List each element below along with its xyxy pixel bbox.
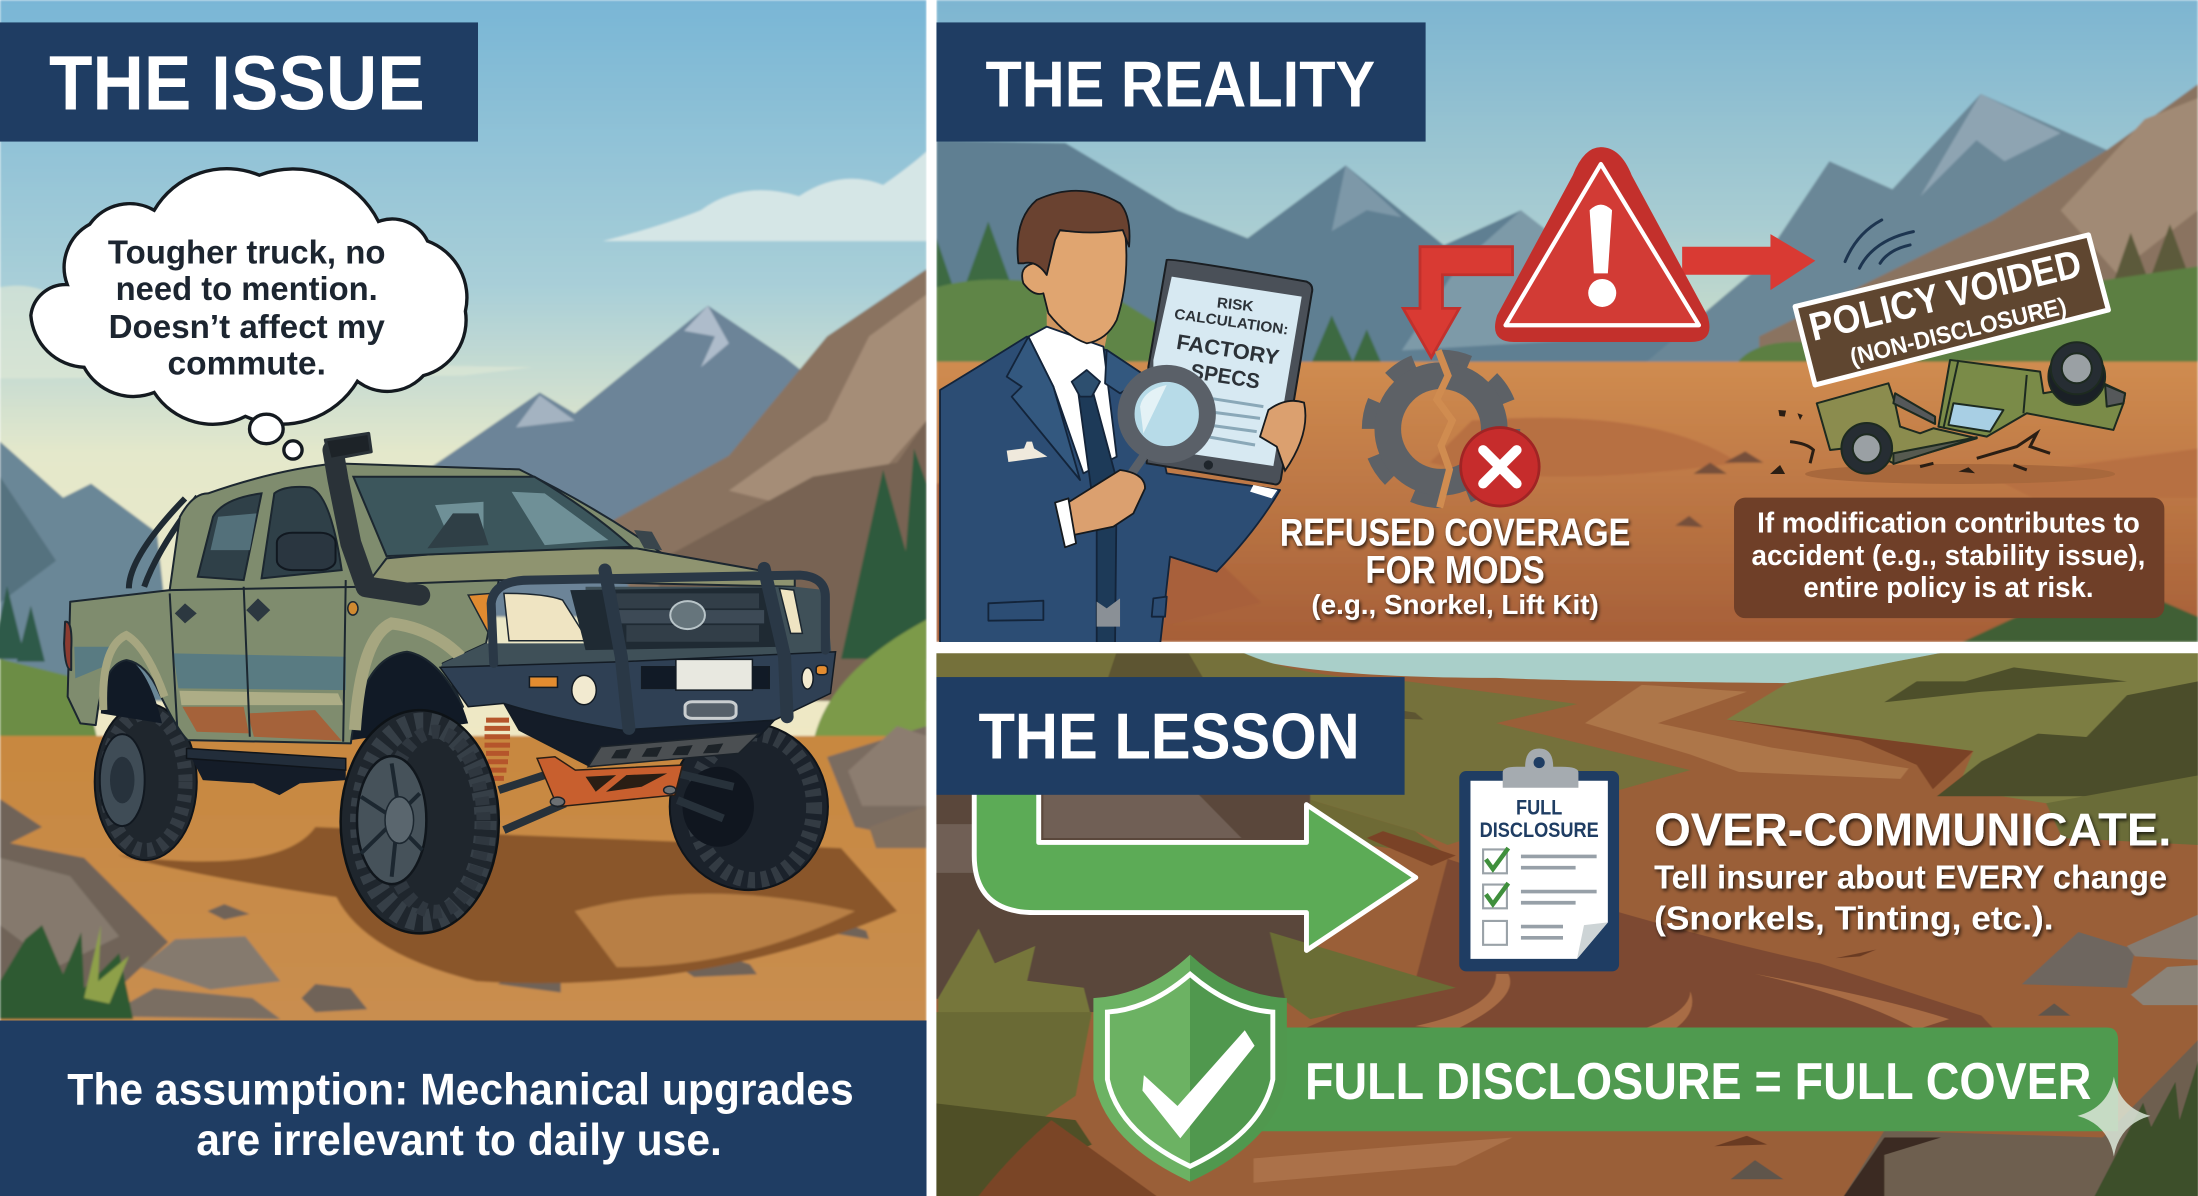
warning triangle with arrows: [1403, 147, 1815, 357]
arrow to policy voided: [1682, 234, 1815, 290]
sky and landscape background: [0, 0, 927, 1023]
clipboard heading: FULL: [1516, 796, 1562, 819]
side windows: [198, 487, 342, 580]
text: refused coverage: REFUSED COVERAGE: [1280, 510, 1630, 554]
thought text: [108, 235, 385, 382]
suit: [940, 312, 1280, 645]
windshield: [353, 477, 631, 556]
front wheel: [341, 710, 499, 933]
tablet text: [1175, 298, 1288, 388]
text: over-communicate: OVER-COMMUNICATE.: [1654, 803, 2171, 855]
bull bar: [491, 568, 825, 728]
icon: full disclosure clipboard: [1459, 749, 1619, 971]
front bumper: [440, 652, 836, 767]
illustration: insurance assessor: [940, 191, 1312, 645]
tablet text: RISK: [1216, 295, 1255, 315]
skid plate and suspension: [485, 720, 759, 830]
right front tyre: [670, 723, 828, 890]
caption: the assumption: The assumption: Mechanical upgrades: [67, 1064, 854, 1115]
left hand: [1055, 470, 1145, 547]
tie clip: [1097, 598, 1120, 627]
decorative sparkle: [2077, 1077, 2150, 1156]
tablet text: FACTORY: [1175, 330, 1281, 370]
cuff: [1250, 485, 1277, 498]
magnifying glass: [1126, 373, 1207, 473]
heading: the lesson: THE LESSON: [978, 700, 1360, 772]
checklist: [1483, 848, 1597, 945]
headlights and indicators: [348, 588, 802, 641]
heading: the reality: THE REALITY: [985, 49, 1375, 121]
panel: the issue: [0, 0, 927, 1196]
text: refused coverage: (e.g., Snorkel, Lift Kit): [1311, 589, 1599, 620]
icon: shield with check: [1093, 955, 1287, 1182]
thought text: commute.: [168, 345, 326, 382]
heading: the issue: [0, 22, 478, 142]
text: over-communicate: Tell insurer about EVERY change: [1654, 860, 2167, 897]
sign: policy voided: POLICY VOIDED: [1805, 242, 2086, 350]
banner: full disclosure equals full cover: FULL DISCLOSURE = FULL COVER: [1305, 1052, 2091, 1110]
panel: the lesson: [930, 650, 2198, 1196]
text: refused coverage: FOR MODS: [1365, 548, 1545, 592]
roll bar: [129, 497, 198, 588]
heading: the lesson: [936, 677, 1405, 795]
thought bubble: [31, 169, 467, 459]
callout: entire policy at risk: entire policy is at risk.: [1803, 572, 2094, 604]
sign: policy voided: (NON-DISCLOSURE): [1847, 293, 2069, 371]
impact lines: [1845, 220, 1913, 268]
heading: the issue: THE ISSUE: [49, 40, 425, 126]
debris and cracks: [1790, 433, 2050, 470]
warning sign: [1495, 147, 1709, 342]
callout: entire policy at risk: If modification contributes to: [1757, 508, 2140, 540]
thought text: need to mention.: [116, 271, 378, 308]
wing mirror: [277, 530, 662, 570]
callout: entire policy at risk: accident (e.g., stability issue),: [1752, 540, 2145, 572]
truck body: [64, 463, 795, 743]
tablet text: CALCULATION:: [1173, 307, 1289, 339]
icon: broken gear: [1371, 350, 1539, 507]
head and hair: [1017, 191, 1130, 343]
heading: the reality: [936, 22, 1426, 142]
tablet text: SPECS: [1189, 359, 1262, 394]
caption: the assumption: are irrelevant to daily use.: [196, 1114, 722, 1165]
illustration: overturned vehicle and policy voided sign: [1770, 220, 2125, 484]
illustration: lifted off-road truck: [64, 433, 836, 933]
callout: entire policy at risk: [1734, 498, 2164, 618]
tablet: [1147, 260, 1312, 484]
door handles: [175, 598, 270, 623]
thought text: Doesn’t affect my: [109, 309, 385, 346]
thought text: Tougher truck, no: [108, 235, 385, 272]
panel behind bumper and grille: [440, 587, 831, 668]
ground shadow: [1805, 464, 2115, 484]
lapel pin: [1007, 442, 1047, 462]
text: refused coverage: [1280, 510, 1630, 620]
rear wheel: [95, 703, 197, 860]
banner: full disclosure equals full cover: [1248, 1028, 2118, 1131]
caption: the assumption: [0, 1020, 927, 1196]
overturned truck: [1817, 342, 2125, 474]
clipboard heading: [1480, 796, 1599, 842]
text: over-communicate: (Snorkels, Tinting, etc.).: [1654, 900, 2054, 937]
side step: [187, 748, 346, 770]
snorkel: [325, 433, 420, 595]
landscape background: [936, 0, 2198, 642]
clipboard heading: DISCLOSURE: [1480, 819, 1599, 842]
right hand: [1260, 401, 1305, 471]
panel: the reality: [936, 0, 2198, 645]
arrow: lesson to disclosure: [974, 785, 1416, 950]
arrow to refused coverage: [1403, 247, 1513, 357]
grille: [570, 587, 785, 650]
dirt road landscape: [930, 650, 2198, 1196]
text: over-communicate: [1654, 803, 2171, 937]
